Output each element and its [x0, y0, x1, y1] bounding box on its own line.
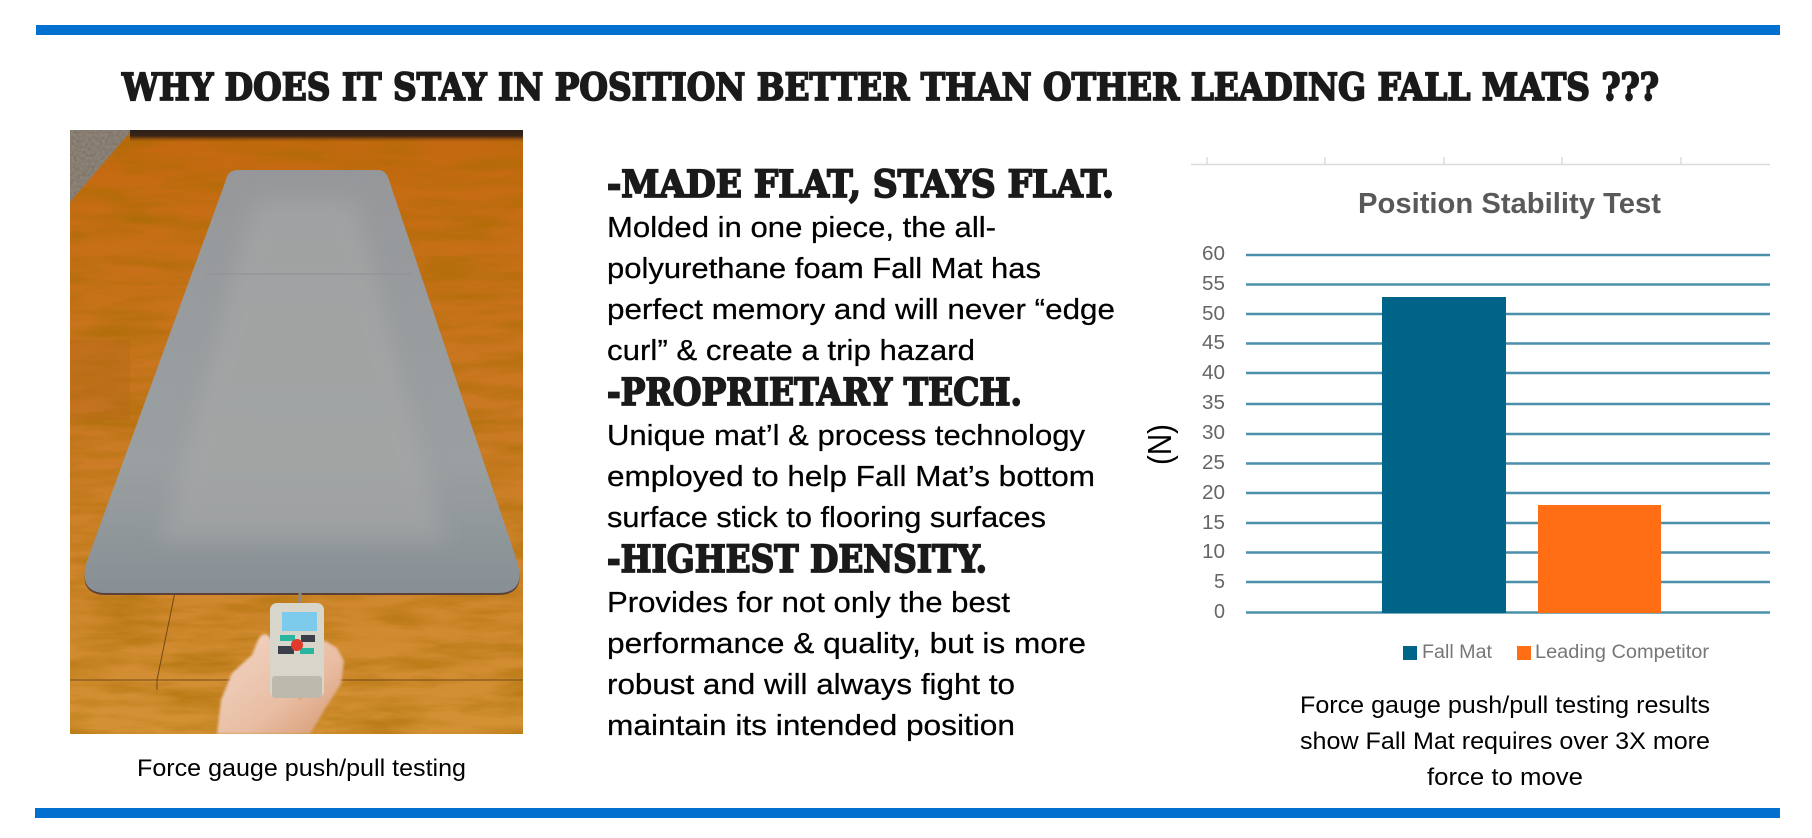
y axis labels: 10: [1202, 541, 1225, 563]
text block: benefits: [607, 162, 1115, 742]
panel: bar chart: [1141, 157, 1770, 663]
photo: hand: [217, 634, 344, 734]
body: proprietary tech: Unique mat’l & process technology: [607, 420, 1086, 452]
panel: photo of mat and force gauge: [70, 130, 523, 734]
photo: dark wall edge: [130, 130, 523, 142]
y axis labels: 55: [1202, 273, 1225, 295]
y axis labels: 25: [1202, 452, 1225, 474]
legend: Fall Mat: [1422, 642, 1493, 663]
y axis labels: 45: [1202, 332, 1225, 354]
y axis labels: 30: [1202, 422, 1225, 444]
gridlines: [1246, 255, 1770, 612]
body: highest density: [607, 587, 1086, 742]
chart caption: [1300, 692, 1710, 791]
heading: highest density: -HIGHEST DENSITY.: [607, 537, 987, 581]
y axis labels: 15: [1202, 512, 1225, 534]
top blue bar: [36, 25, 1780, 35]
y axis labels: 40: [1202, 362, 1225, 384]
body: made flat: [607, 212, 1115, 367]
y axis labels: 50: [1202, 303, 1225, 325]
chart caption: force to move: [1427, 764, 1583, 791]
y axis labels: [1202, 243, 1225, 623]
bottom blue bar: [35, 808, 1780, 818]
body: made flat: perfect memory and will never “edge: [607, 294, 1115, 326]
body: proprietary tech: [607, 420, 1095, 534]
y axis labels: 35: [1202, 392, 1225, 414]
photo: grey fall mat: [85, 170, 519, 595]
photo caption: Force gauge push/pull testing: [137, 755, 466, 782]
photo: carpet corner: [70, 130, 134, 204]
y axis labels: 60: [1202, 243, 1225, 265]
body: made flat: polyurethane foam Fall Mat has: [607, 253, 1041, 285]
y axis labels: 5: [1214, 571, 1225, 593]
legend: Leading Competitor: [1535, 642, 1710, 663]
chart caption: Force gauge push/pull testing results: [1300, 692, 1710, 719]
chart caption: show Fall Mat requires over 3X more: [1300, 728, 1710, 755]
chart title: Position Stability Test: [1358, 188, 1661, 220]
stray axis with ticks: [1191, 157, 1770, 164]
legend: [1403, 642, 1710, 663]
body: made flat: curl” & create a trip hazard: [607, 335, 975, 367]
body: highest density: robust and will always fight to: [607, 669, 1015, 701]
y axis labels: 20: [1202, 482, 1225, 504]
body: highest density: performance & quality, but is more: [607, 628, 1086, 660]
body: proprietary tech: surface stick to flooring surfaces: [607, 502, 1046, 534]
y axis unit: (N): [1141, 424, 1178, 465]
title: WHY DOES IT STAY IN POSITION BETTER THAN OTHER LEADING FALL MATS ???: [121, 65, 1659, 109]
body: made flat: Molded in one piece, the all-: [607, 212, 996, 244]
heading: made flat: -MADE FLAT, STAYS FLAT.: [607, 162, 1114, 206]
heading: proprietary tech: -PROPRIETARY TECH.: [607, 370, 1022, 414]
photo: force gauge: [270, 592, 324, 698]
body: highest density: maintain its intended position: [607, 710, 1015, 742]
body: highest density: Provides for not only the best: [607, 587, 1010, 619]
body: proprietary tech: employed to help Fall Mat’s bottom: [607, 461, 1095, 493]
photo: wood floor: [70, 130, 523, 734]
bar: Leading Competitor: [1538, 505, 1661, 613]
bar: Fall Mat: [1382, 297, 1506, 613]
y axis labels: 0: [1214, 601, 1225, 623]
